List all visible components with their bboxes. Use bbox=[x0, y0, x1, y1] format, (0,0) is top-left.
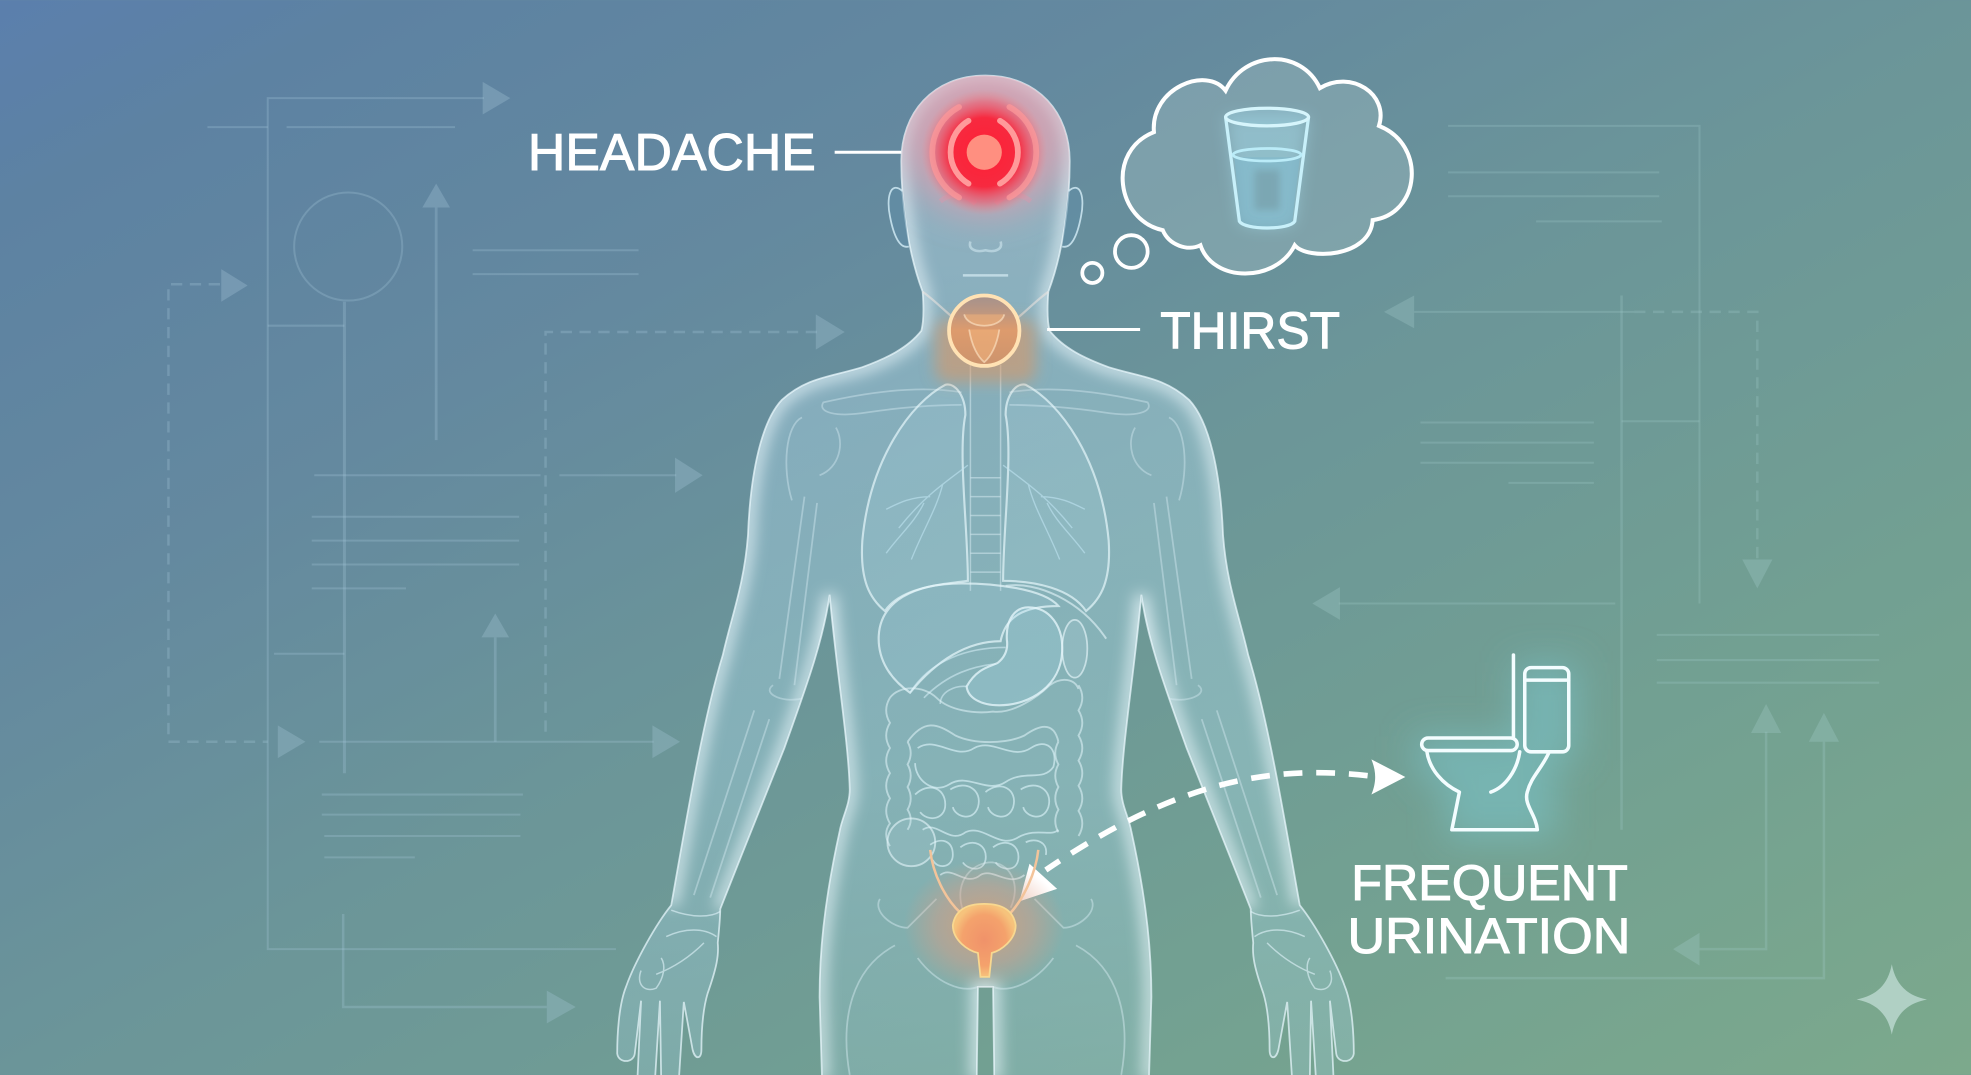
blueprint schematic: right side bbox=[1312, 126, 1879, 978]
small intestine bbox=[915, 744, 1058, 879]
hand details bbox=[640, 910, 1331, 989]
headache pain glow on head bbox=[903, 63, 1068, 215]
text: URINATION: URINATION bbox=[1348, 907, 1630, 964]
toilet lines bbox=[1422, 655, 1569, 830]
blueprint schematic: left side bbox=[168, 82, 845, 1023]
throat ring bbox=[949, 296, 1019, 366]
leader line bbox=[835, 151, 901, 153]
spleen bbox=[1062, 620, 1087, 678]
pancreas bbox=[910, 647, 1006, 704]
pain centre dot bbox=[967, 135, 1002, 170]
larynx shape bbox=[964, 314, 1004, 362]
stomach bbox=[967, 607, 1062, 705]
icon: glass of water bbox=[1226, 108, 1309, 228]
bladder highlight bbox=[904, 850, 1065, 991]
cloud bbox=[1123, 59, 1412, 274]
icon: sparkle bbox=[1857, 964, 1927, 1035]
diaphragm left lobe bbox=[1006, 585, 1106, 639]
inner edge glow bbox=[671, 76, 1300, 1075]
trachea and spine bbox=[970, 365, 1001, 591]
bronchi branches bbox=[886, 465, 1085, 559]
ureters bbox=[930, 850, 1038, 913]
liver bbox=[879, 583, 1058, 693]
pelvis lines bbox=[846, 862, 1125, 1075]
small bubbles bbox=[1115, 235, 1148, 268]
caecum bbox=[887, 818, 935, 866]
ears bbox=[889, 188, 1082, 247]
collarbones and arm bones bbox=[694, 389, 1277, 898]
text: HEADACHE: HEADACHE bbox=[528, 123, 816, 181]
pain waves bbox=[932, 107, 1036, 197]
thought bubble bbox=[1082, 59, 1412, 283]
lungs bbox=[862, 384, 1109, 611]
text: THIRST: THIRST bbox=[1160, 301, 1340, 359]
body silhouette bbox=[617, 76, 1354, 1075]
arrowhead to toilet bbox=[1371, 759, 1405, 795]
dashed two-way arrow bbox=[1019, 759, 1405, 901]
pink halo bbox=[903, 63, 1068, 214]
human body figure bbox=[617, 76, 1354, 1075]
face features bbox=[923, 195, 1048, 319]
throat highlight bbox=[935, 296, 1036, 382]
toilet glow bbox=[1414, 663, 1578, 840]
arrowhead to bladder bbox=[1019, 864, 1057, 901]
text: FREQUENT: FREQUENT bbox=[1351, 854, 1628, 911]
red pain core bbox=[921, 89, 1047, 215]
icon: toilet bbox=[1414, 655, 1578, 840]
frequent urination label bbox=[1348, 854, 1630, 964]
orange glow bbox=[904, 860, 1065, 991]
leader line bbox=[1047, 328, 1140, 331]
bladder organ bbox=[953, 904, 1016, 977]
orange glow bbox=[935, 319, 1036, 382]
large intestine bbox=[886, 680, 1082, 846]
